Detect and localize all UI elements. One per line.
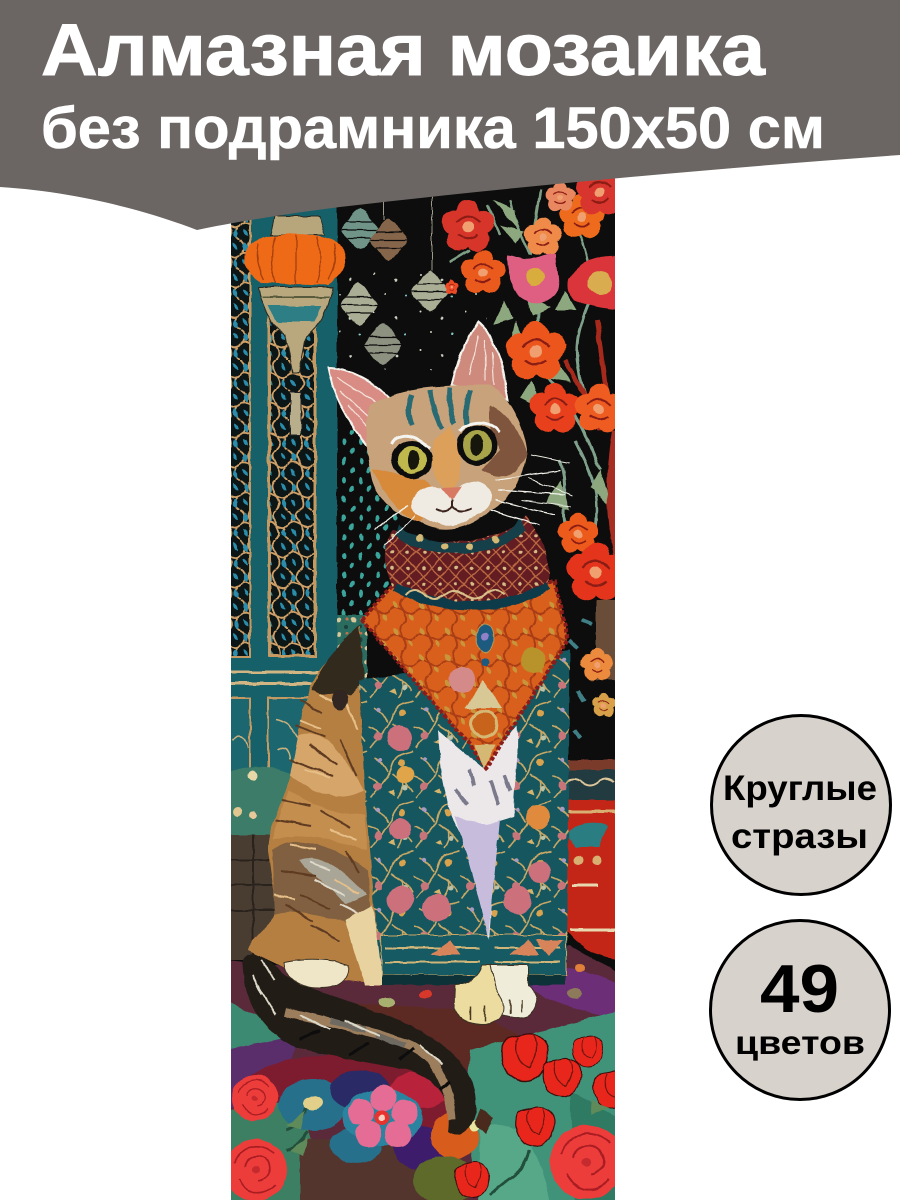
header banner (0, 0, 900, 230)
embroidered collar shawl (385, 515, 549, 607)
orange hanging lantern (245, 216, 346, 436)
red vase (566, 759, 615, 960)
patterned rug and flowers (225, 945, 630, 1200)
ornate orange bib (362, 582, 568, 768)
badge: 49 colours (710, 920, 890, 1100)
cat fur body (248, 625, 385, 985)
badge: round rhinestones: Круглые (723, 769, 877, 808)
title: Алмазная мозаика (41, 10, 767, 91)
black background with hanging lamps (337, 170, 621, 690)
paws (284, 959, 537, 1024)
badge: 49 colours: цветов (735, 1024, 865, 1061)
badge: round rhinestones (712, 716, 890, 894)
badge: 49 colours: 49 (760, 951, 839, 1027)
white chest fur and leg (438, 725, 518, 940)
background bush and fence (231, 766, 290, 960)
subtitle: без подрамника 150х50 см (41, 96, 825, 161)
panel: diamond painting artwork (225, 167, 630, 1200)
robe (360, 650, 570, 985)
left ornamental teal doors (231, 208, 338, 774)
floral branches (442, 167, 626, 738)
badge: round rhinestones: стразы (731, 817, 868, 856)
tail (243, 954, 476, 1135)
cat head (328, 321, 565, 545)
